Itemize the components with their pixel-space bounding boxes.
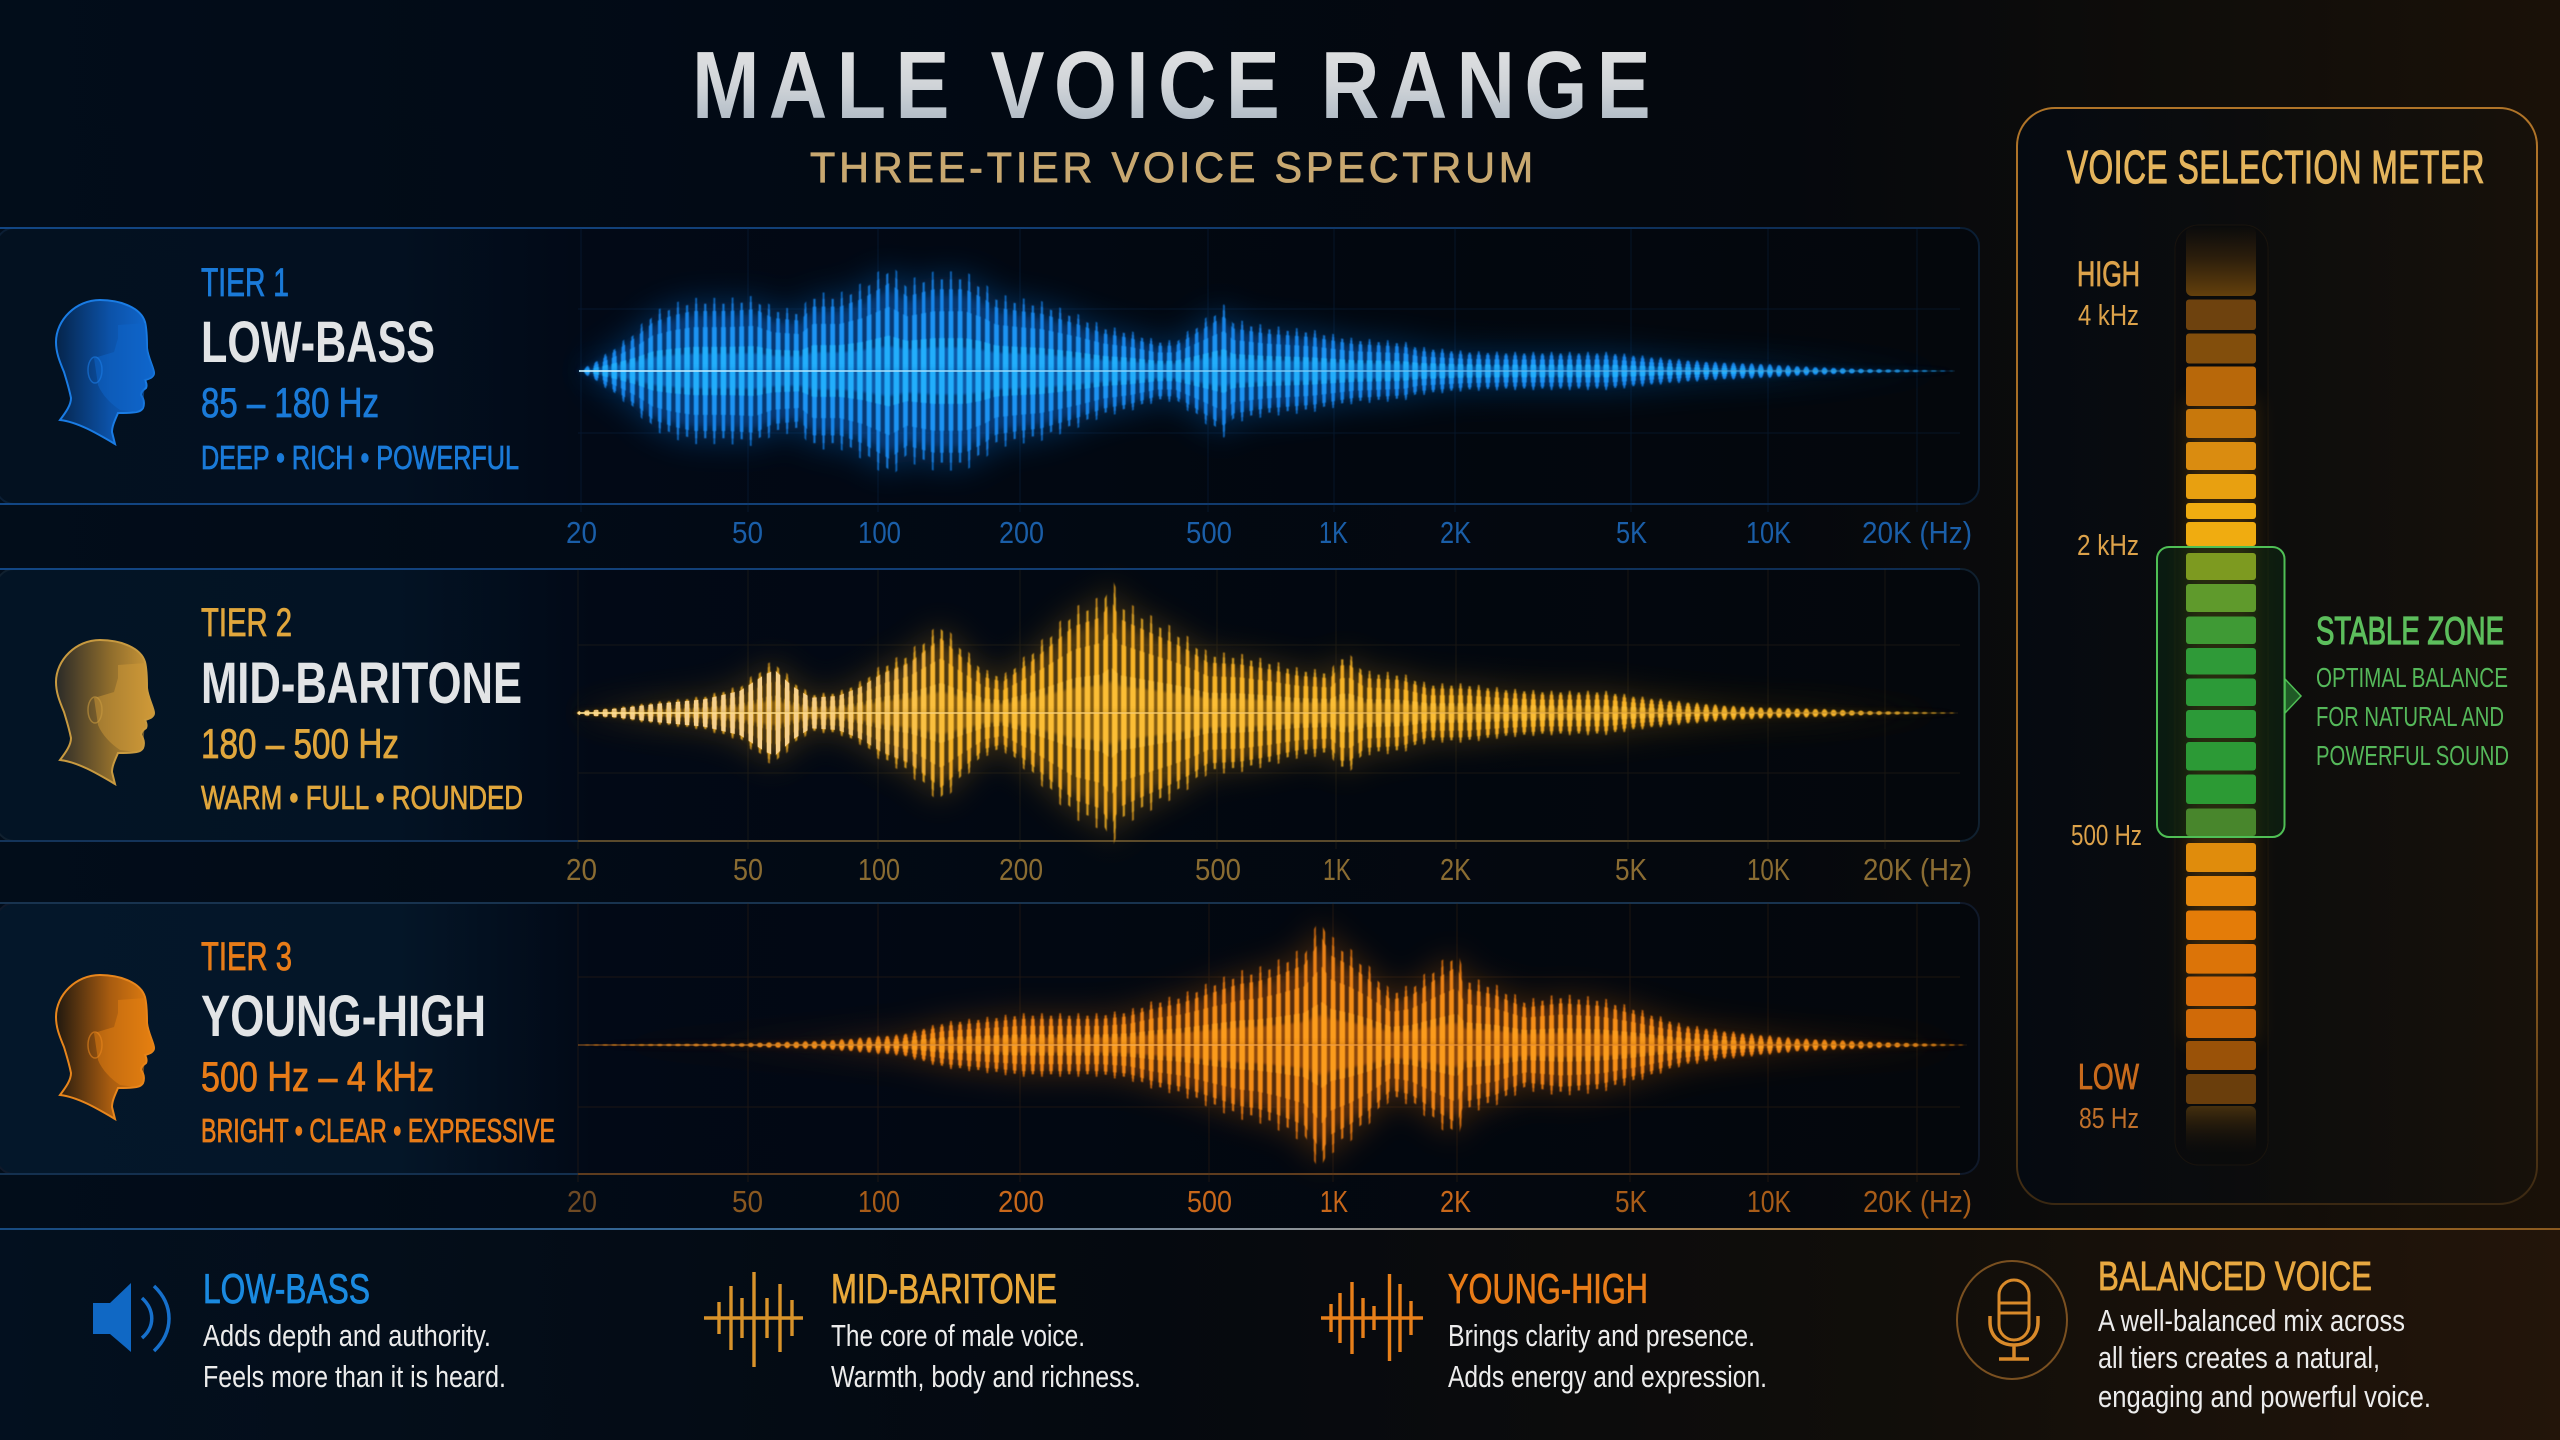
frequency axis tier 3: 5K xyxy=(1615,1184,1647,1219)
icon: microphone xyxy=(1957,1261,2067,1379)
icon: orange waveform xyxy=(1321,1274,1423,1361)
frequency axis tier 3: 1K xyxy=(1320,1184,1348,1219)
stable zone description xyxy=(2316,662,2509,771)
frequency axis tier 2: 10K xyxy=(1747,852,1790,887)
meter scale labels: 2 kHz xyxy=(2077,530,2139,562)
frequency axis tier 3: 10K xyxy=(1747,1184,1791,1219)
frequency axis tier 1: 1K xyxy=(1319,515,1348,550)
frequency axis tier 2: 2K xyxy=(1440,852,1471,887)
waveform: gold xyxy=(577,575,1959,851)
frequency axis tier 1: 2K xyxy=(1440,515,1471,550)
frequency axis tier 1: 5K xyxy=(1616,515,1647,550)
tier 1 traits: DEEP • RICH • POWERFUL xyxy=(201,439,519,476)
arrow: stable zone pointer xyxy=(2285,679,2301,713)
legend heading: BALANCED VOICE xyxy=(2098,1253,2372,1299)
panel: tier 3 young-high xyxy=(0,902,1979,1219)
meter scale labels: 500 Hz xyxy=(2071,820,2142,852)
icon: gold waveform xyxy=(704,1272,803,1367)
frequency axis tier 1: 10K xyxy=(1746,515,1791,550)
legend text: The core of male voice. xyxy=(831,1318,1085,1353)
legend text: Brings clarity and presence. xyxy=(1448,1318,1755,1353)
meter scale labels xyxy=(2071,255,2142,1135)
panel: voice selection meter xyxy=(2017,108,2537,1204)
frequency axis tier 3 xyxy=(567,1184,1972,1219)
panel: tier 1 low-bass xyxy=(0,227,1979,550)
frequency axis tier 3: 2K xyxy=(1440,1184,1471,1219)
frequency axis tier 2: 5K xyxy=(1615,852,1647,887)
tier 3 label: TIER 3 xyxy=(201,935,292,979)
frequency axis tier 1 xyxy=(566,515,1972,550)
legend text: Feels more than it is heard. xyxy=(203,1359,506,1394)
tier 1 name: LOW-BASS xyxy=(201,310,435,375)
tier 2 label: TIER 2 xyxy=(201,601,292,645)
legend text xyxy=(1448,1318,1767,1394)
legend heading: LOW-BASS xyxy=(203,1265,370,1312)
legend text xyxy=(831,1318,1141,1394)
tier 1 range: 85 – 180 Hz xyxy=(201,379,379,426)
frequency axis tier 3: 20K (Hz) xyxy=(1863,1184,1972,1219)
waveform: orange xyxy=(578,915,1967,1175)
frequency axis tier 3: 200 xyxy=(998,1184,1044,1219)
title block xyxy=(692,32,1660,192)
tier 1 label: TIER 1 xyxy=(201,261,289,305)
frequency axis tier 2: 20K (Hz) xyxy=(1863,852,1972,887)
separator line xyxy=(0,1228,2560,1230)
frequency axis tier 2: 50 xyxy=(733,852,763,887)
meter scale labels: LOW xyxy=(2078,1056,2139,1097)
frequency axis tier 2: 20 xyxy=(566,852,597,887)
frequency axis tier 1: 100 xyxy=(858,515,901,550)
frequency axis tier 1: 500 xyxy=(1186,515,1232,550)
legend text: engaging and powerful voice. xyxy=(2098,1379,2431,1414)
legend text: A well-balanced mix across xyxy=(2098,1303,2405,1338)
meter scale labels: 85 Hz xyxy=(2079,1103,2139,1135)
icon: orange head xyxy=(56,975,154,1119)
frequency axis tier 3: 500 xyxy=(1187,1184,1232,1219)
legend text xyxy=(203,1318,506,1394)
waveform: blue xyxy=(579,264,1955,478)
legend: balanced voice xyxy=(1957,1253,2431,1414)
frequency axis tier 3: 100 xyxy=(858,1184,900,1219)
legend text: all tiers creates a natural, xyxy=(2098,1340,2380,1375)
frequency axis tier 2: 200 xyxy=(999,852,1043,887)
icon: blue head xyxy=(56,300,154,444)
frequency axis tier 2 xyxy=(566,852,1972,887)
legend: mid-baritone xyxy=(704,1265,1141,1394)
frequency axis tier 1: 20K (Hz) xyxy=(1862,515,1972,550)
title: MALE VOICE RANGE xyxy=(692,32,1660,139)
frequency axis tier 1: 20 xyxy=(566,515,597,550)
meter scale labels: HIGH xyxy=(2077,255,2140,294)
legend text: Adds depth and authority. xyxy=(203,1318,491,1353)
meter scale labels: 4 kHz xyxy=(2078,300,2139,332)
frequency axis tier 2: 500 xyxy=(1195,852,1241,887)
panel: tier 2 mid-baritone xyxy=(0,568,1979,887)
tier 2 traits: WARM • FULL • ROUNDED xyxy=(201,779,523,816)
subtitle: THREE-TIER VOICE SPECTRUM xyxy=(810,144,1537,192)
frequency axis tier 2: 100 xyxy=(858,852,900,887)
icon: speaker xyxy=(93,1283,169,1352)
legend text: Adds energy and expression. xyxy=(1448,1359,1767,1394)
legend text: Warmth, body and richness. xyxy=(831,1359,1141,1394)
frequency axis tier 1: 50 xyxy=(732,515,763,550)
stable zone bracket xyxy=(2157,547,2301,837)
tier 2 range: 180 – 500 Hz xyxy=(201,720,399,767)
tier 2 name: MID-BARITONE xyxy=(201,651,522,716)
frequency axis tier 3: 50 xyxy=(732,1184,763,1219)
legend heading: YOUNG-HIGH xyxy=(1448,1265,1648,1312)
icon: gold head xyxy=(56,640,154,784)
frequency axis tier 1: 200 xyxy=(999,515,1044,550)
legend: young-high xyxy=(1321,1265,1767,1394)
meter track xyxy=(2175,225,2268,1165)
legend heading: MID-BARITONE xyxy=(831,1265,1057,1312)
frequency axis tier 3: 20 xyxy=(567,1184,597,1219)
frequency axis tier 2: 1K xyxy=(1323,852,1351,887)
tier 3 name: YOUNG-HIGH xyxy=(201,984,486,1049)
legend text xyxy=(2098,1303,2431,1414)
legend: low-bass xyxy=(93,1265,506,1394)
tier 3 range: 500 Hz – 4 kHz xyxy=(201,1053,434,1100)
tier 3 traits: BRIGHT • CLEAR • EXPRESSIVE xyxy=(201,1112,555,1149)
